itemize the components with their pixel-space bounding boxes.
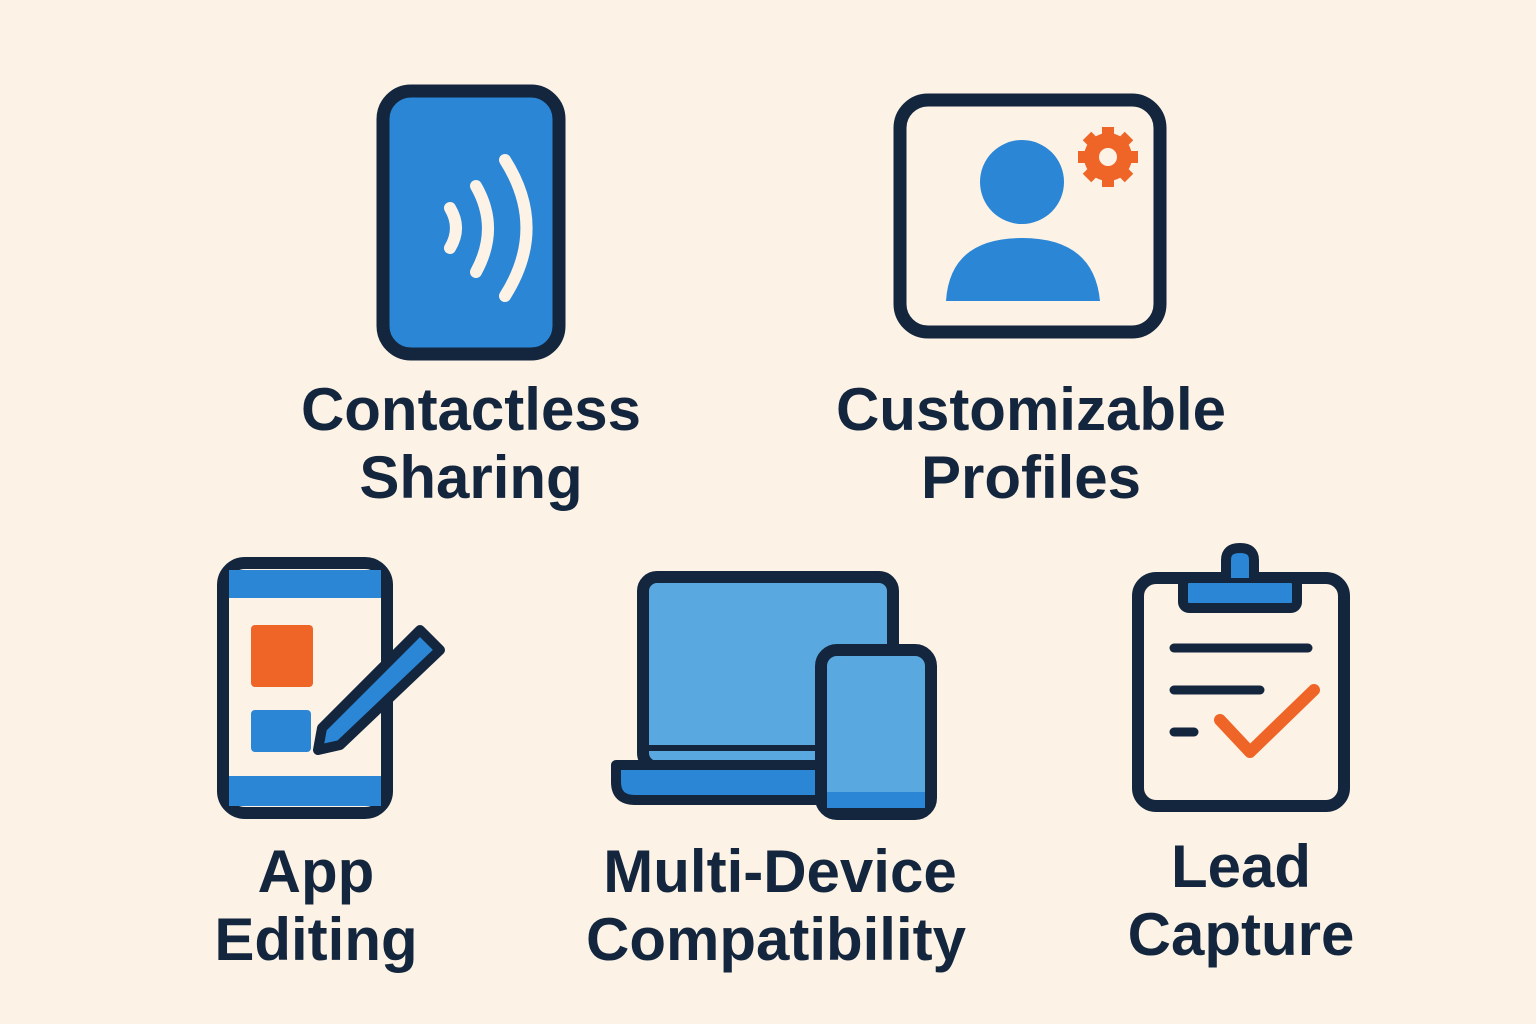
- icon: customizable profile card: [900, 100, 1160, 332]
- heading: Customizable Profiles: Customizable: [836, 376, 1226, 443]
- heading: Customizable Profiles: [836, 376, 1226, 511]
- heading: App Editing: [214, 838, 418, 973]
- heading: Contactless Sharing: [301, 376, 641, 511]
- heading: Contactless Sharing: Contactless: [301, 376, 641, 443]
- heading: App Editing: App: [258, 838, 374, 905]
- heading: Customizable Profiles: Profiles: [921, 444, 1141, 511]
- icon: lead capture clipboard: [1138, 548, 1344, 806]
- icon: multi-device laptop and phone: [616, 577, 931, 814]
- heading: Contactless Sharing: Sharing: [359, 444, 583, 511]
- icon: app editing phone: [223, 563, 440, 813]
- heading: Lead Capture: [1128, 833, 1354, 968]
- heading: App Editing: Editing: [214, 906, 418, 973]
- icon: contactless phone: [383, 91, 559, 354]
- heading: Lead Capture: Capture: [1128, 901, 1354, 968]
- heading: Multi-Device Compatibility: Compatibility: [586, 906, 967, 973]
- heading: Lead Capture: Lead: [1171, 833, 1311, 900]
- heading: Multi-Device Compatibility: Multi-Device: [603, 838, 957, 905]
- heading: Multi-Device Compatibility: [586, 838, 967, 973]
